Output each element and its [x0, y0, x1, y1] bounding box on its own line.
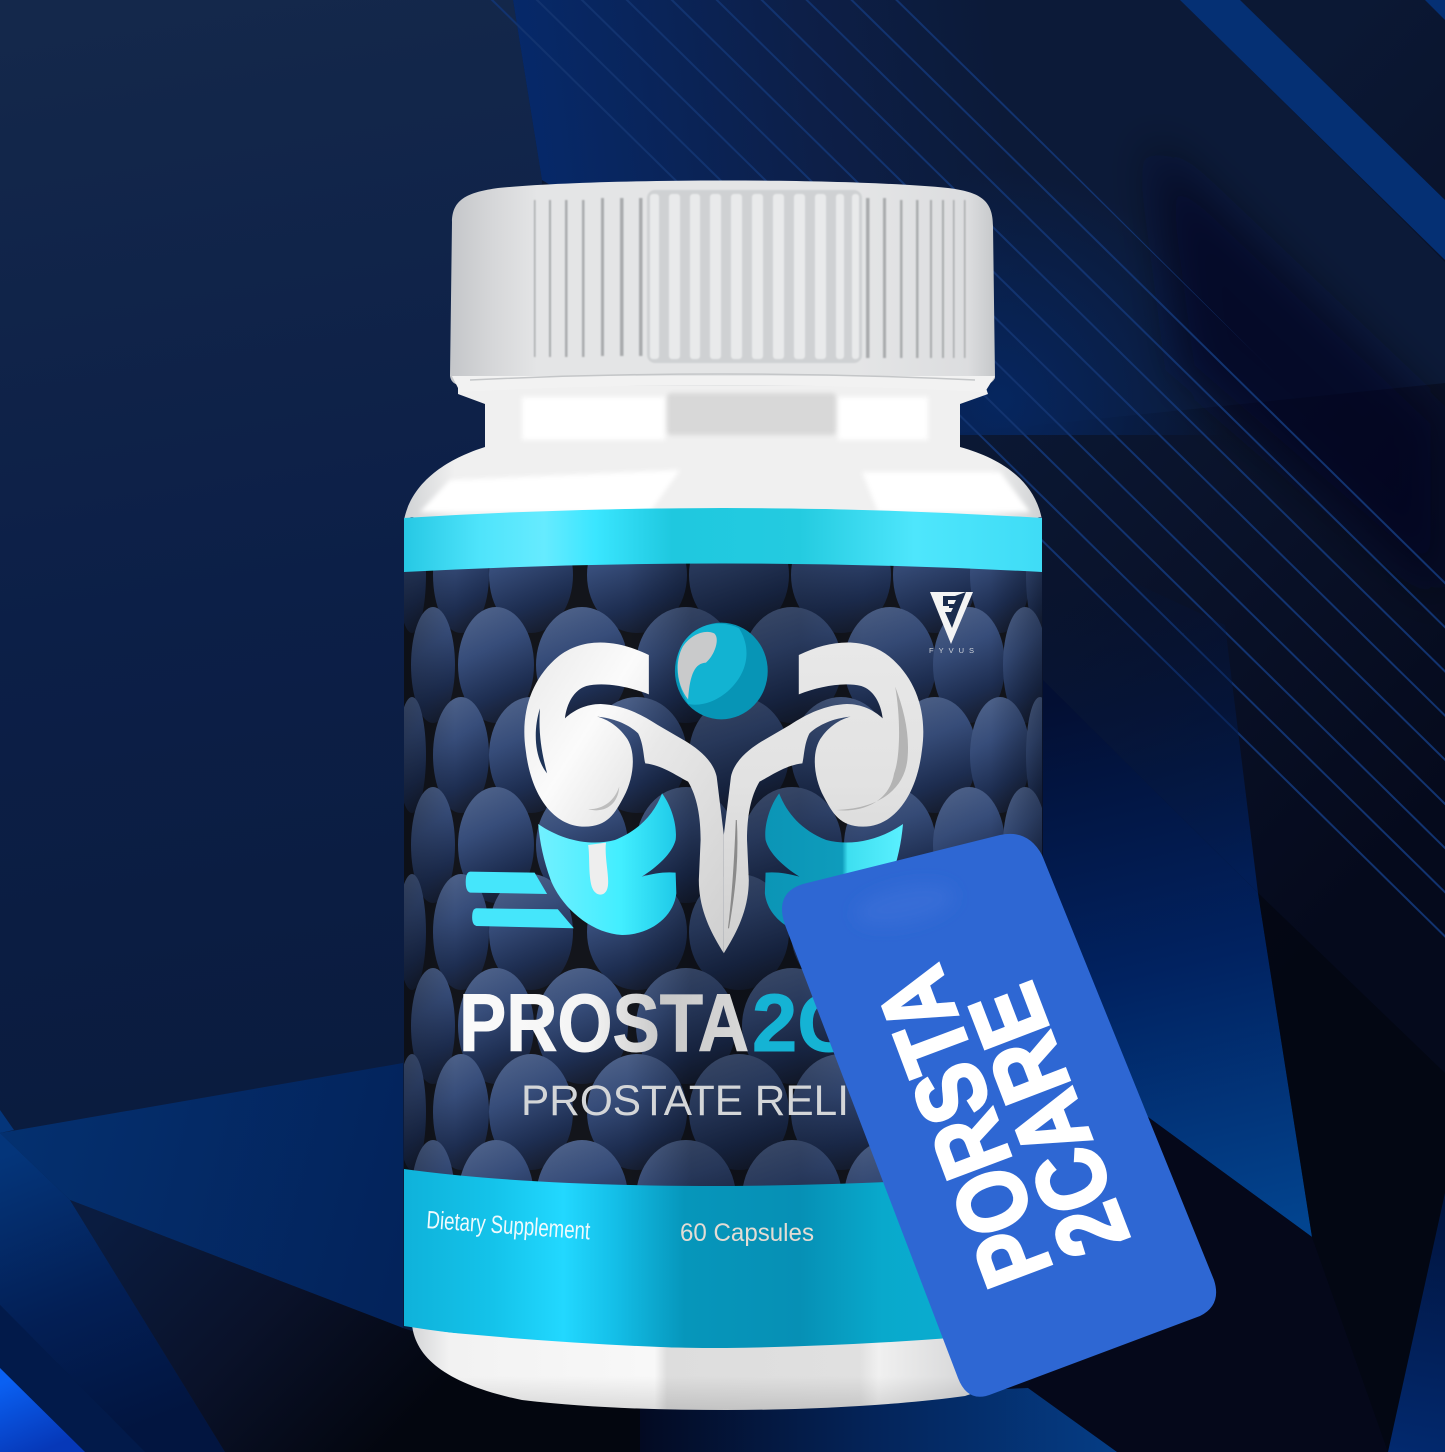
right facets	[1043, 540, 1258, 893]
top blue facet	[513, 0, 1445, 433]
lower cyan band	[404, 1169, 943, 1348]
bottle label	[398, 508, 1054, 1348]
subtitle: PROSTATE RELI	[521, 1077, 849, 1125]
drip highlight	[588, 843, 608, 895]
label scale pattern	[404, 517, 1042, 1186]
kidney shading	[536, 687, 908, 928]
capsule count: 60 Capsules	[680, 1219, 814, 1247]
bottle neck and shoulder	[404, 385, 1042, 520]
sticker text line 2: 2CARE	[948, 971, 1150, 1271]
bottom edge facets	[640, 1388, 1117, 1452]
brand logo: FYVUS	[929, 592, 979, 655]
cap	[450, 180, 995, 392]
sphere	[675, 623, 768, 719]
darker diagonal wedge	[1150, 140, 1445, 600]
cap centre ridge block	[647, 190, 862, 363]
dark right region	[450, 0, 1445, 1452]
dietary supplement text: Dietary Supplement	[426, 1206, 591, 1245]
right kidney and ureter	[724, 642, 923, 953]
left kidney and ureter	[524, 642, 724, 953]
cap side ridges	[534, 198, 966, 358]
brand logo: FYVUS: FYVUS	[929, 646, 979, 655]
diagonal stripes	[490, 0, 1445, 940]
top right bright band	[1180, 0, 1445, 260]
right wing	[765, 793, 903, 935]
bottom left facets	[0, 1063, 403, 1328]
product bottle	[398, 180, 1054, 1410]
product name accent: 2C	[752, 978, 856, 1069]
upper cyan band	[404, 508, 1042, 572]
speed bars	[466, 872, 574, 928]
blue sticker tag	[782, 834, 1216, 1397]
bottle base	[412, 1325, 1034, 1410]
left wing	[538, 793, 676, 935]
sticker text line 1: PORSTA	[855, 955, 1073, 1300]
prostate logo	[466, 623, 923, 953]
product name: PROSTA	[459, 978, 749, 1069]
